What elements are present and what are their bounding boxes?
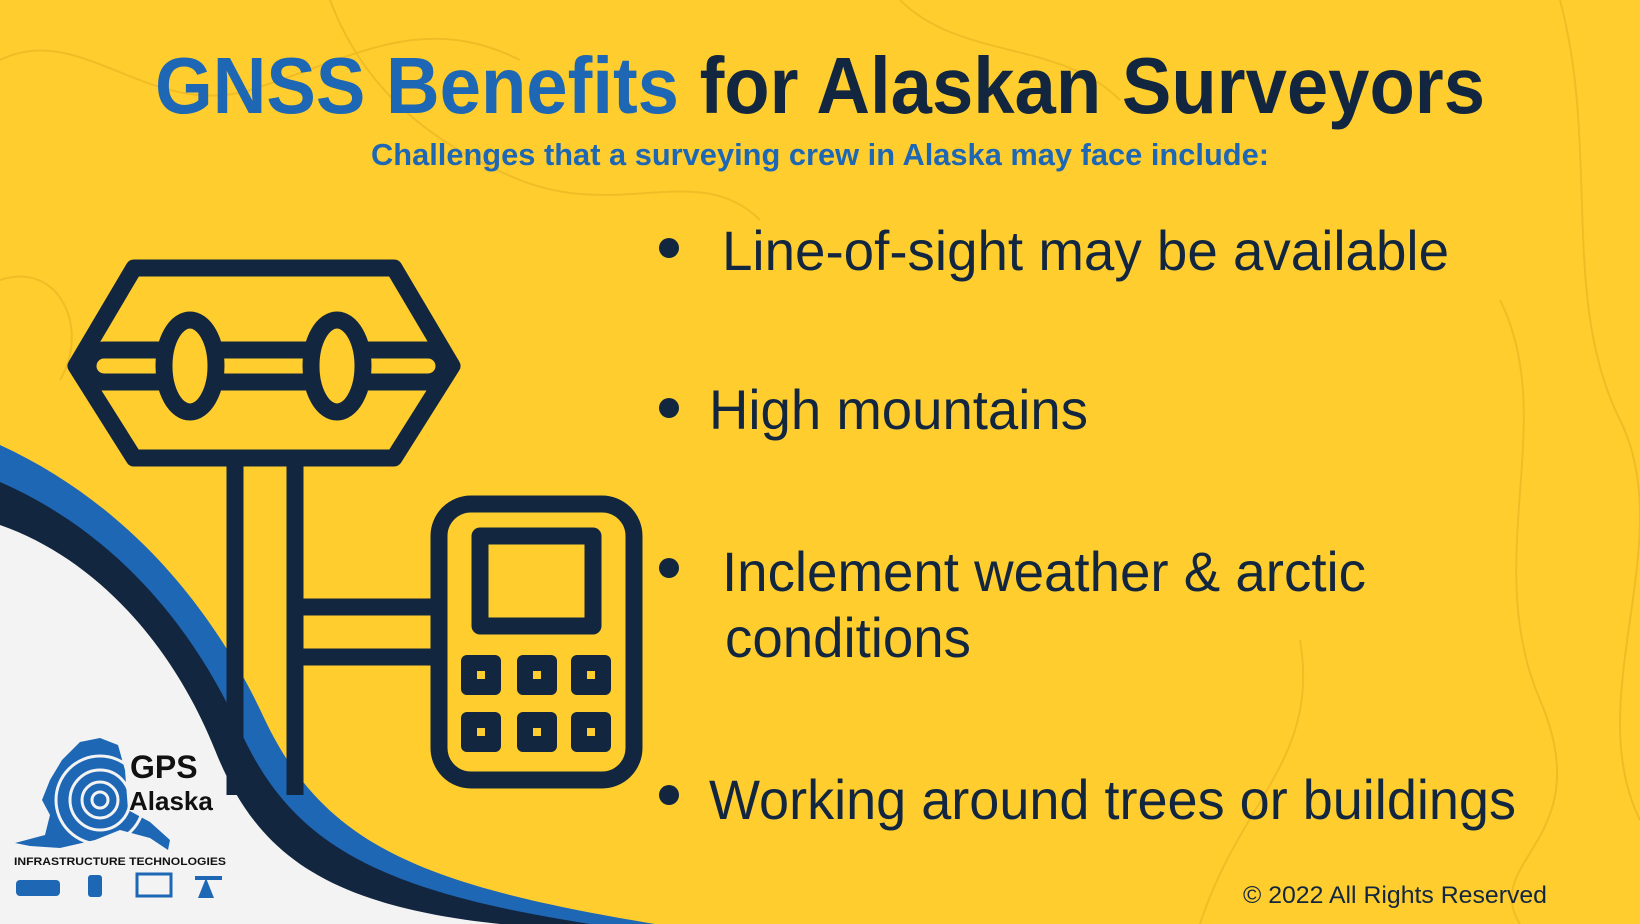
logo: GPS Alaska: Alaska — [129, 786, 213, 816]
bullet list: High mountains — [709, 378, 1088, 441]
copyright: © 2022 All Rights Reserved — [1243, 882, 1547, 909]
bullet list: Inclement weather & arctic — [722, 540, 1366, 603]
title: GNSS Benefits for Alaskan Surveyors — [155, 41, 1485, 130]
logo: GPS Alaska: GPS — [130, 749, 198, 785]
bullet list: conditions — [725, 606, 971, 669]
icon: GPS receiver on pole with controller — [76, 268, 634, 795]
logo: GPS Alaska — [14, 738, 226, 898]
subtitle: Challenges that a surveying crew in Alaska may face include: — [371, 137, 1269, 172]
bullet list: Line-of-sight may be available — [722, 219, 1449, 282]
bullet list — [659, 219, 1516, 831]
bullet list: Working around trees or buildings — [709, 768, 1516, 831]
bottom-left waves — [0, 445, 655, 924]
logo: GPS Alaska: INFRASTRUCTURE TECHNOLOGIES — [14, 856, 226, 868]
